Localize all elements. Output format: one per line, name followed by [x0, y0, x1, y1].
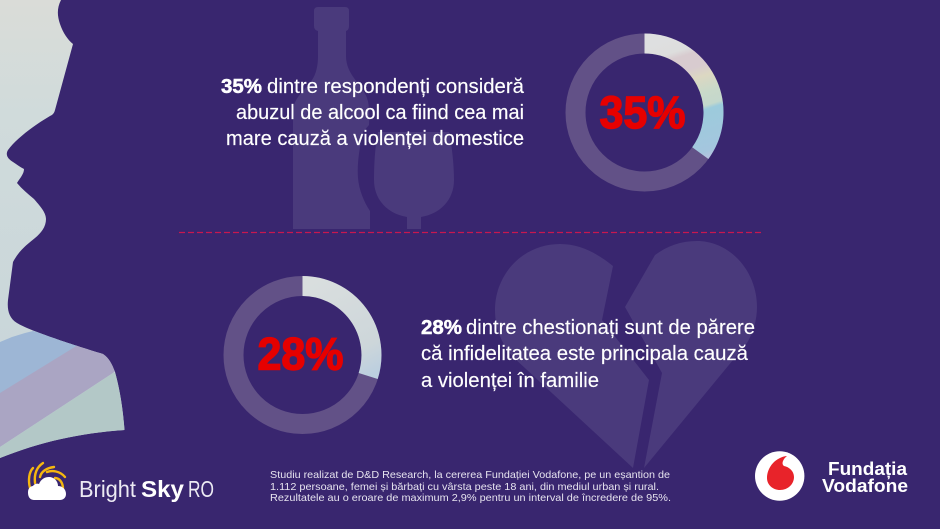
text block: infidelity statistic: 28%: [421, 317, 462, 339]
text block: alcohol statistic: 35%: [221, 76, 262, 98]
text block: alcohol statistic: abuzul de alcool ca fiind cea mai: [236, 102, 524, 124]
divider: [179, 232, 761, 234]
icon: wine glass: [374, 132, 454, 229]
text block: infidelity statistic: a violenței în familie: [421, 370, 599, 392]
text block: alcohol statistic: [221, 76, 525, 150]
logo: Bright Sky RO: [28, 463, 214, 502]
donut chart: 28%: [234, 286, 372, 424]
icon: Vodafone speech mark: [755, 451, 804, 501]
logo: Fundația Vodafone: Vodafone: [822, 475, 908, 496]
text block: alcohol statistic: mare cauză a violenței domestice: [226, 128, 524, 150]
text block: study footnote: [270, 469, 671, 504]
text block: infidelity statistic: că infidelitatea este principala cauză: [421, 343, 749, 365]
text block: infidelity statistic: [421, 317, 755, 392]
icon: wine bottle: [293, 7, 370, 229]
text block: study footnote: Studiu realizat de D&D Research, la cererea Fundației Vodafone, pe un eșantion de: [270, 469, 670, 481]
icon: sun and cloud: [28, 463, 66, 500]
logo: Bright Sky RO: Bright: [79, 476, 137, 502]
donut chart: 28%: 28%: [258, 328, 344, 380]
logo: Fundația Vodafone: [755, 451, 908, 501]
donut chart: 35%: [576, 44, 714, 182]
text block: study footnote: Rezultatele au o eroare de maximum 2,9% pentru un interval de încredere de 95%.: [270, 492, 671, 504]
text block: study footnote: 1.112 persoane, femei și bărbați cu vârsta peste 18 ani, din mediul urban și rural.: [270, 481, 659, 493]
logo: Bright Sky RO: Sky: [141, 476, 184, 502]
donut chart: 35%: 35%: [600, 87, 686, 138]
logo: Fundația Vodafone: Fundația: [828, 458, 908, 479]
logo: Bright Sky RO: RO: [188, 476, 214, 502]
icon: broken heart: [495, 241, 757, 468]
photo silhouette of a face: [0, 0, 130, 460]
text block: infidelity statistic: dintre chestionați sunt de părere: [466, 317, 755, 339]
text block: alcohol statistic: dintre respondenți consideră: [267, 76, 525, 98]
